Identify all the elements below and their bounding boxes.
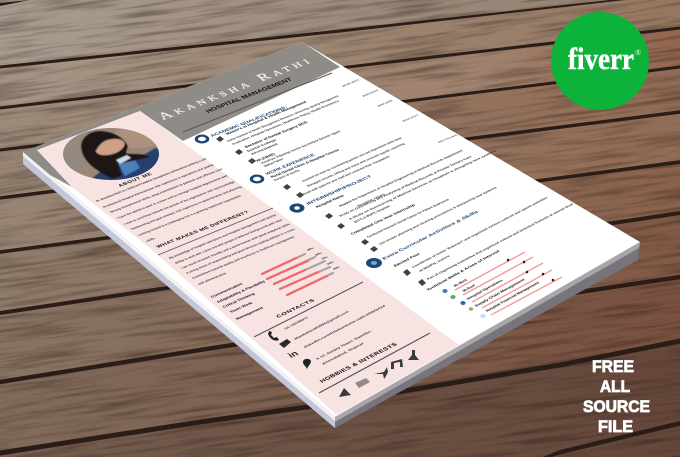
icon: book [355, 378, 370, 388]
section: academic qualifications: Madhya Pradesh [263, 158, 284, 168]
section: extra curricular activities and skills: at MGIPS, Indore [418, 255, 451, 273]
date column: 2009-2014 [361, 89, 380, 98]
icon: tent [339, 388, 351, 397]
skills bar chart: 70% [320, 255, 329, 261]
white page sheet [23, 42, 640, 417]
section: work experience: Dealt with patients and staff and resolved their complaints [302, 155, 391, 196]
skill rating rows [442, 252, 562, 318]
icon: person [408, 350, 419, 360]
date column: 2017-Present [437, 134, 458, 144]
section: contacts: A 12, Sanjay Tower, Satellite, [315, 330, 373, 361]
icon: music [391, 359, 403, 369]
section: internship and project: INTERNSHIP/PROJECT [305, 174, 374, 206]
free all source file caption: FREE [592, 357, 634, 376]
skills labels: Critical Thinking [221, 292, 256, 309]
skills bar chart: 90% [332, 265, 341, 271]
date column [341, 78, 458, 144]
profile photo [63, 128, 159, 180]
section: what makes me different: WHAT MAKES ME DIFFERENT? [155, 210, 251, 249]
section: about me: Strong interpersonal skills, deep commitment to patients and efficient care [109, 168, 224, 214]
icon: internship badge [290, 203, 304, 213]
skills bar chart: 80% [306, 246, 315, 252]
section: contacts: akanksharathi555@gmail.com [293, 310, 350, 341]
skills bar chart: 90% [326, 260, 335, 266]
section: contacts: linkedin.com/in/akanksha-rathi-bhbfa414 [303, 304, 386, 349]
section: academic qualifications: Dental College [246, 138, 277, 153]
paper stack thickness [23, 152, 640, 428]
date column: 2015-2017 [341, 78, 361, 88]
section: about me: I have the ability to work in a team and to manage hospital departments well [116, 174, 229, 220]
skill: Hospital Financial Management: Hospital Financial Management [484, 280, 541, 313]
section: hobbies and interests [319, 333, 430, 393]
free all source file caption [583, 357, 650, 436]
icon: linkedin: in [286, 349, 301, 359]
section: internship and project: Use proper planning and cleaning procedures & sharpening new systems [378, 186, 498, 246]
contact icons [268, 331, 311, 369]
section: internship and project: Completed One Year Internship [349, 203, 417, 236]
section: work experience: Rural Dental Clinic & Hospital Course [269, 148, 341, 179]
section: extra curricular activities and skills: Part of Organising Committee that organized cultural and technical festivals at annual level [426, 203, 574, 281]
section: academic qualifications: ACADEMIC QUALIFICATIONS: [209, 105, 289, 138]
section: academic qualifications: Kendriya Vidyalaya Senior Secondary School, Ujjain [260, 130, 341, 165]
pink sidebar [37, 111, 459, 415]
skill: Ms Word: Ms Word [452, 278, 468, 288]
section: academic qualifications: Ahmedabad [250, 143, 279, 156]
icon: work badge [250, 174, 264, 184]
skill icons [442, 289, 486, 318]
section: about me: Looking forward to a challenging role in a growing healthcare organisation [137, 194, 242, 237]
skills labels: Management [234, 306, 265, 321]
grey header band [23, 42, 340, 187]
section: contacts: +91-7201305974 [283, 316, 309, 331]
skill: Hospital Operations: Hospital Operations [465, 278, 504, 301]
skills labels: Team Work [228, 301, 254, 314]
hobby icons [339, 350, 419, 397]
section: what makes me different [155, 208, 296, 286]
section: work experience: Managed records, billing and stock and ensured regular reporting [306, 142, 406, 188]
section: extra curricular activities and skills: Coordinator of event "Rotaract" and organised various cultural and sports activities [411, 196, 549, 269]
section: extra curricular activities and skills: Elected Post [392, 252, 421, 268]
date column: 2008-2009 [376, 99, 394, 108]
skills labels: Adaptability & Flexibility [215, 279, 267, 304]
section: what makes me different: My knowledge of hospital operations and hospital management and quality [168, 214, 277, 260]
icon: activities badge [366, 258, 382, 268]
section: about me: ABOUT ME [117, 172, 154, 188]
bullet arrows [216, 136, 426, 286]
skills bar chart [262, 246, 341, 295]
section: internship and project: Hospital, Ujjain [356, 193, 386, 208]
section: about me: I wish to contribute towards the growth of the organisation with my knowledge [123, 180, 236, 226]
section: internship and project: A Study on Outsourcing of Medical Services at Hospitals & designing new systems [348, 149, 497, 221]
section: internship and project: (2017) at MGIPS, Hospitals [353, 205, 391, 224]
skills labels: Communication [209, 282, 244, 299]
section: extra curricular activities and skills: Extra Curricular Activities & Skills [381, 210, 480, 261]
icon: location pin [303, 359, 311, 369]
section: internship and project [290, 149, 498, 246]
skills labels [209, 279, 267, 321]
section: work experience: Duration 18 months [273, 169, 301, 182]
section: what makes me different: A strong sense of responsibility and good decision making abilities in a crisis [185, 228, 296, 275]
section: about me: Hardworking and goal oriented, with experience in administration and planning [130, 185, 243, 231]
section: about me: Professional Hospital Administrator with experience in operations and quality [102, 163, 215, 209]
date column: 2016-2017 [401, 114, 420, 123]
section: academic qualifications: XII (CBSE) [254, 152, 277, 163]
free all source file caption: FILE [598, 417, 633, 436]
skills bar chart: 90% [314, 251, 323, 257]
fiverr badge: ® [635, 49, 641, 57]
skill: Ms Excel: Ms Excel [461, 283, 476, 293]
section: academic qualifications: Bachelor of Dental Surgery BDS [243, 120, 309, 149]
section: academic qualifications [195, 94, 341, 168]
name: Akanksha Rathi [155, 56, 313, 122]
resume page [23, 42, 640, 417]
section: extra curricular activities and skills: Technical Skills & Areas of Interest [425, 249, 501, 292]
section: academic qualifications: Indian Institute of Health Management Research, University, Quality Management [226, 94, 340, 143]
section: contacts: Ahmedabad, Gujarat [321, 342, 366, 366]
section: academic qualifications: Master's in Hospital & Health Management [224, 100, 308, 136]
section: about me [95, 157, 243, 243]
free all source file caption: ALL [600, 377, 630, 396]
icon: plane [374, 367, 388, 379]
icon: email [279, 339, 291, 348]
section: internship and project: Hospital Name [314, 193, 346, 209]
section: internship and project: Conducted Outreach Dental Camps for Patient Awareness [366, 198, 450, 239]
section: what makes me different: I am result oriented, friendly and a quick learner with good analytical skills [180, 223, 291, 270]
section: academic qualifications: Graduation: Hospital Operations, Healthcare Policy, Health Economics [231, 100, 340, 146]
section: internship and project: Mapped the Department of Hospital Engineering at Medical Records Department [338, 149, 464, 208]
section: contacts: CONTACTS [275, 298, 317, 319]
section: contacts [254, 282, 386, 366]
job title: HOSPITAL MANAGEMENT [205, 77, 295, 114]
header rule [183, 73, 332, 132]
free all source file caption: SOURCE [583, 397, 650, 416]
section: work experience: Assisted the team by coordinating patient care and department tasks daily [301, 137, 403, 183]
section: what makes me different: and administration [197, 272, 227, 286]
section: what makes me different: Commitment towards quality and excellence in healthcare management [191, 235, 296, 280]
section: what makes me different: Ability to work with a team and with people of different backgrounds with ease [174, 219, 283, 265]
section: work experience: WORK EXPERIENCE [264, 153, 316, 176]
section: work experience [250, 137, 406, 196]
icon: academic badge [195, 134, 209, 144]
fiverr badge: fiverr [568, 41, 634, 76]
icon: phone [268, 331, 279, 341]
section: about me: Dr. Akanksha Rathi is a dedicated hospital management professional seeking a role [95, 157, 208, 203]
skill: Supply Chain Management: Supply Chain Management [473, 277, 526, 308]
section: extra curricular activities and skills [366, 196, 574, 292]
section: hobbies and interests: HOBBIES & INTERESTS [319, 342, 399, 384]
section: about me: skills [145, 237, 156, 243]
fiverr badge [551, 12, 649, 110]
section: internship and project: Study on Outsourcing and Analysing of Medical Records at Private Tertiary Care [338, 155, 473, 218]
